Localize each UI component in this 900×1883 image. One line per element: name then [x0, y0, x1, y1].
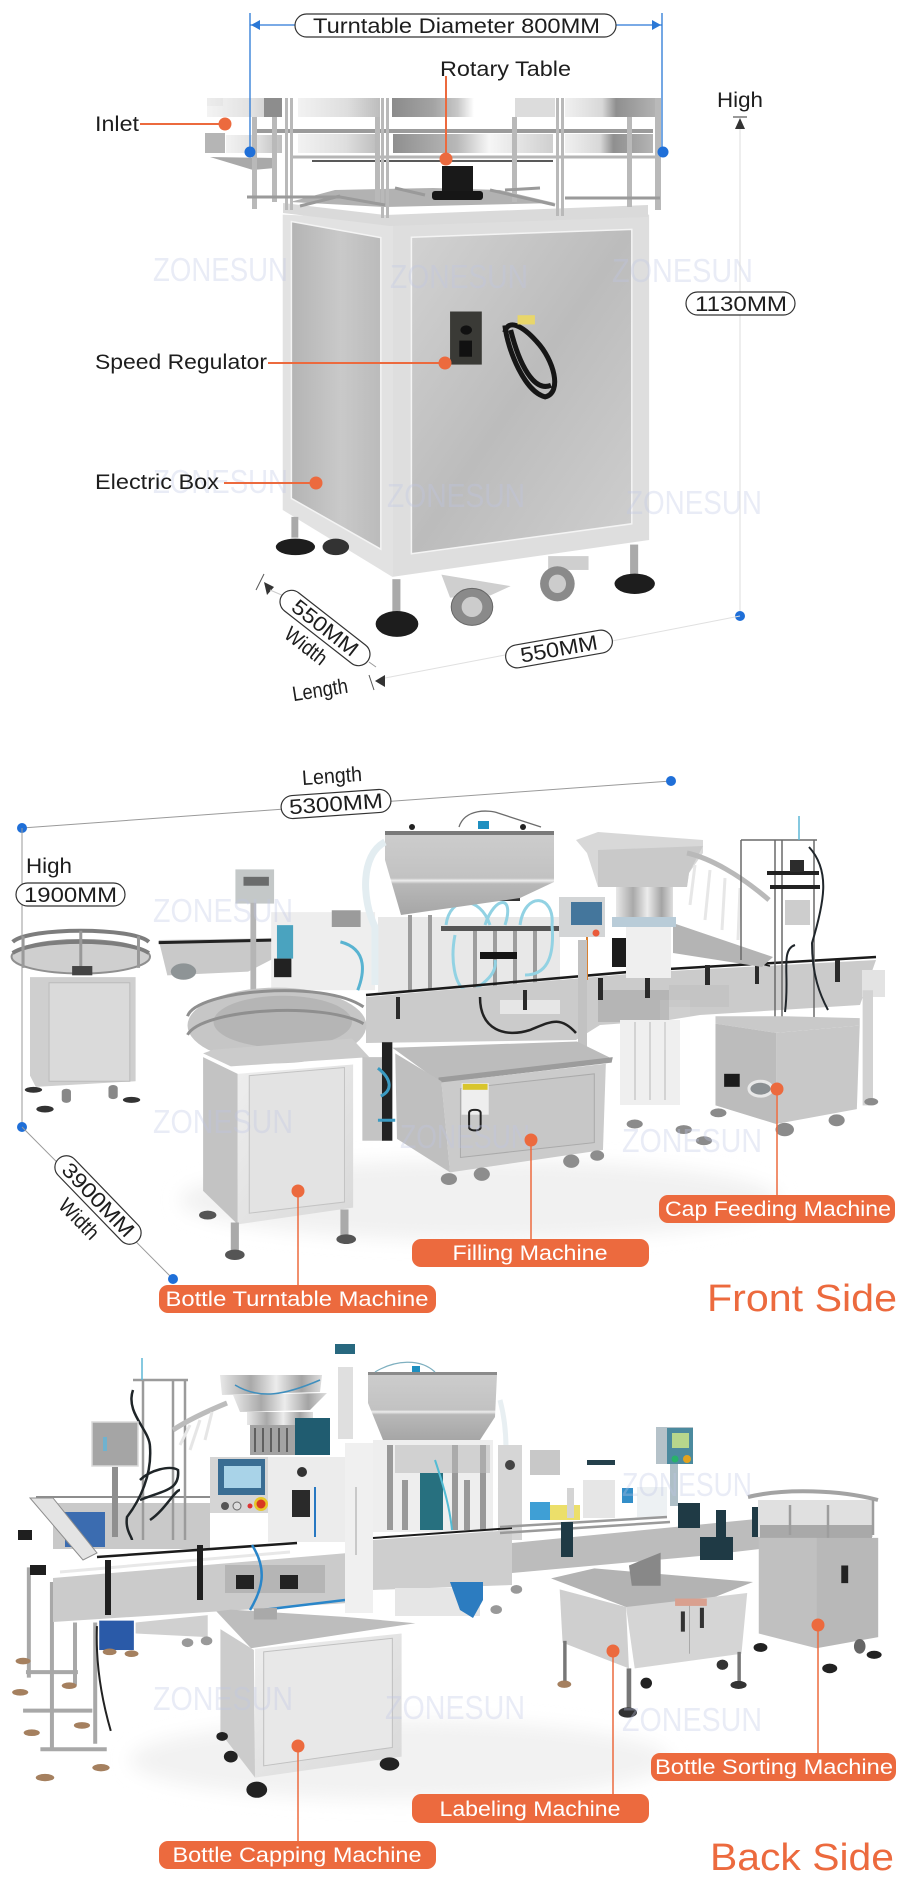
panel: back side machinery	[12, 1344, 882, 1800]
hopper tube	[366, 842, 385, 985]
callout: bottle turntable machine	[159, 1184, 436, 1313]
right turntable cabinet	[759, 1538, 816, 1648]
cap column	[626, 926, 671, 978]
callout: electric box	[95, 471, 322, 494]
callout: rotary table: Rotary Table	[440, 58, 571, 81]
callout: filling machine	[412, 1134, 649, 1267]
filling base casters	[441, 1150, 604, 1185]
dimension: machine height: High	[717, 89, 763, 112]
dimension: line width: 3900MM	[57, 1159, 139, 1242]
nozzles	[410, 915, 535, 990]
conveyor plates	[500, 985, 729, 1022]
cabinet door	[411, 229, 632, 554]
filling base top	[392, 1041, 613, 1081]
cap bowl	[576, 832, 703, 887]
cables	[480, 997, 576, 1033]
right conveyor	[512, 1517, 777, 1573]
capping base side	[220, 1629, 255, 1778]
labeler cluster	[530, 1450, 667, 1520]
feet and casters	[276, 517, 655, 637]
centre base	[395, 1588, 480, 1616]
cap feeding cabinet	[715, 1016, 860, 1033]
watermarks: top: ZONESUN	[390, 258, 528, 295]
callout: filling machine: Filling Machine	[452, 1242, 608, 1265]
speed regulator box	[450, 312, 482, 365]
callout: rotary table	[440, 58, 571, 166]
cap chute tray	[673, 923, 773, 967]
stand feet	[12, 1658, 110, 1781]
callout: inlet: Inlet	[95, 113, 139, 136]
dimension: line width: Width	[54, 1194, 104, 1245]
cable	[97, 1626, 111, 1731]
hopper	[368, 1373, 497, 1440]
callout: bottle sorting machine	[651, 1618, 896, 1781]
back tube	[500, 1400, 506, 1490]
panel: rotary table machine	[205, 98, 661, 637]
centre motor	[450, 1582, 483, 1618]
watermarks: top: ZONESUN	[153, 251, 288, 288]
watermarks: back	[153, 1466, 762, 1738]
capping base wheels	[216, 1732, 399, 1798]
heading: back side: Back Side	[710, 1837, 894, 1879]
capper frame	[741, 840, 817, 1020]
small turntable rings	[12, 940, 150, 973]
dimension: machine width: Width	[280, 623, 332, 670]
centre conveyor	[373, 1530, 512, 1590]
touch screen	[210, 1457, 268, 1513]
blue motor	[99, 1621, 134, 1650]
cap bowl	[220, 1375, 327, 1455]
dimension: line height: High	[26, 855, 72, 878]
dimension: machine height	[686, 89, 795, 621]
cabinet front frame	[392, 215, 649, 577]
dimension: line height	[16, 828, 125, 1132]
filler frame	[378, 917, 560, 992]
capper cables	[127, 1390, 180, 1540]
conveyor brackets	[18, 1530, 476, 1615]
right turntable	[748, 1491, 878, 1538]
watermarks: front	[153, 892, 762, 1159]
nozzle rail	[441, 926, 559, 931]
dimension: turntable diameter: Turntable Diameter 800MM	[313, 15, 600, 38]
watermarks: front: ZONESUN	[153, 1103, 293, 1140]
labeling base side	[560, 1589, 629, 1668]
labeler cluster	[271, 910, 375, 990]
dimension: machine length	[291, 616, 740, 706]
callout: electric box: Electric Box	[95, 471, 220, 494]
control box	[92, 1422, 138, 1466]
cap chute	[687, 853, 769, 900]
dimension: line length: 5300MM	[288, 790, 384, 819]
heading: front side: Front Side	[707, 1278, 897, 1320]
cable	[505, 325, 555, 397]
touch screen	[559, 897, 605, 937]
conveyor knobs	[396, 960, 840, 1019]
door handle	[469, 1110, 481, 1130]
upper ring	[207, 98, 658, 117]
watermarks: back: ZONESUN	[622, 1466, 752, 1503]
filler tubes	[446, 901, 553, 990]
watermarks: top: ZONESUN	[153, 463, 288, 500]
capping base front	[255, 1633, 402, 1778]
main conveyor	[366, 960, 876, 1043]
callout: speed regulator	[95, 351, 452, 374]
callout: bottle capping machine: Bottle Capping Machine	[172, 1844, 422, 1867]
side frame and feet	[863, 990, 873, 1105]
bottle turntable cabinet	[203, 1057, 238, 1224]
right conveyor brackets	[561, 1503, 764, 1560]
callout: labeling machine: Labeling Machine	[440, 1798, 620, 1821]
capper frame	[133, 1380, 188, 1540]
dimension: line height: 1900MM	[24, 884, 117, 907]
bottle turntable feet	[199, 1209, 356, 1260]
bottle turntable disc	[188, 988, 366, 1063]
hopper sensor	[459, 811, 541, 827]
pneumatic cylinder	[362, 1057, 383, 1141]
posts	[252, 98, 661, 218]
back base feet	[103, 1585, 522, 1657]
watermarks: back: ZONESUN	[153, 1680, 293, 1717]
dimension: machine length: 550MM	[519, 631, 599, 668]
labeling base front	[626, 1593, 747, 1668]
dimension: machine height: 1130MM	[695, 293, 787, 316]
dimension: line width	[22, 1127, 178, 1284]
callout: labeling machine	[412, 1644, 649, 1823]
floor shadow	[130, 1720, 670, 1800]
conveyor motor	[171, 963, 196, 980]
labeling base legs	[557, 1641, 747, 1718]
blue hoses	[250, 1545, 345, 1610]
valve unit	[498, 1445, 522, 1540]
capper bed	[53, 1503, 210, 1549]
capper cables	[785, 847, 828, 1012]
dimension: turntable diameter	[244, 13, 668, 158]
hopper	[385, 833, 554, 915]
deck brackets	[247, 188, 660, 206]
watermarks: front: ZONESUN	[622, 1122, 762, 1159]
watermarks: top: ZONESUN	[626, 484, 762, 521]
labeling base top	[551, 1568, 753, 1607]
floor shadow	[180, 1160, 780, 1240]
dimension: line length: Length	[301, 763, 363, 790]
control box	[235, 869, 274, 904]
dimension: machine length: Length	[291, 675, 350, 706]
panel buttons	[221, 1497, 268, 1511]
ladder stand	[23, 1567, 107, 1749]
watermarks: top: ZONESUN	[612, 252, 753, 289]
watermarks: top	[153, 251, 762, 521]
cabinet left side	[283, 215, 392, 577]
dimension: line length	[17, 763, 676, 833]
capper motor	[295, 1418, 330, 1455]
filling base side	[395, 1053, 450, 1172]
filling base front	[441, 1064, 606, 1172]
callout: inlet	[95, 113, 232, 136]
cap chute	[173, 1403, 227, 1430]
dimension: machine width: 550MM	[287, 595, 363, 661]
small turntable legs	[25, 1085, 140, 1112]
side panel	[291, 222, 381, 549]
capper head	[767, 860, 820, 925]
watermarks: front: ZONESUN	[153, 892, 293, 929]
capper mechanism	[268, 1457, 345, 1542]
watermarks: front: ZONESUN	[400, 1118, 530, 1155]
callout: bottle capping machine	[159, 1740, 436, 1869]
panel: front side machinery	[12, 811, 885, 1260]
table rim	[210, 157, 655, 170]
right turntable feet	[754, 1639, 882, 1673]
spindle	[432, 166, 483, 200]
deck	[283, 203, 648, 226]
callout: bottle turntable machine: Bottle Turntable Machine	[166, 1288, 428, 1311]
diagonal chute	[30, 1498, 97, 1560]
dimension: machine width	[256, 574, 376, 671]
callout: cap feeding machine	[659, 1082, 895, 1223]
left conveyor	[53, 1553, 348, 1622]
capper slide	[225, 1565, 325, 1593]
watermarks: back: ZONESUN	[385, 1689, 525, 1726]
watermarks: back: ZONESUN	[622, 1701, 762, 1738]
capping base top	[216, 1610, 415, 1648]
cable tag	[518, 315, 535, 324]
back conveyor	[159, 938, 277, 975]
watermarks: top: ZONESUN	[387, 477, 525, 514]
capper column	[338, 1367, 353, 1439]
callout: cap feeding machine: Cap Feeding Machine	[665, 1198, 891, 1221]
lower ring	[205, 129, 653, 153]
labeler panel	[656, 1427, 693, 1506]
end box	[862, 970, 885, 997]
warning label	[462, 1083, 489, 1115]
nozzle section	[373, 1440, 493, 1532]
callout: speed regulator: Speed Regulator	[95, 351, 267, 374]
small turntable cabinet	[30, 977, 136, 1087]
callout: bottle sorting machine: Bottle Sorting Machine	[655, 1756, 893, 1779]
